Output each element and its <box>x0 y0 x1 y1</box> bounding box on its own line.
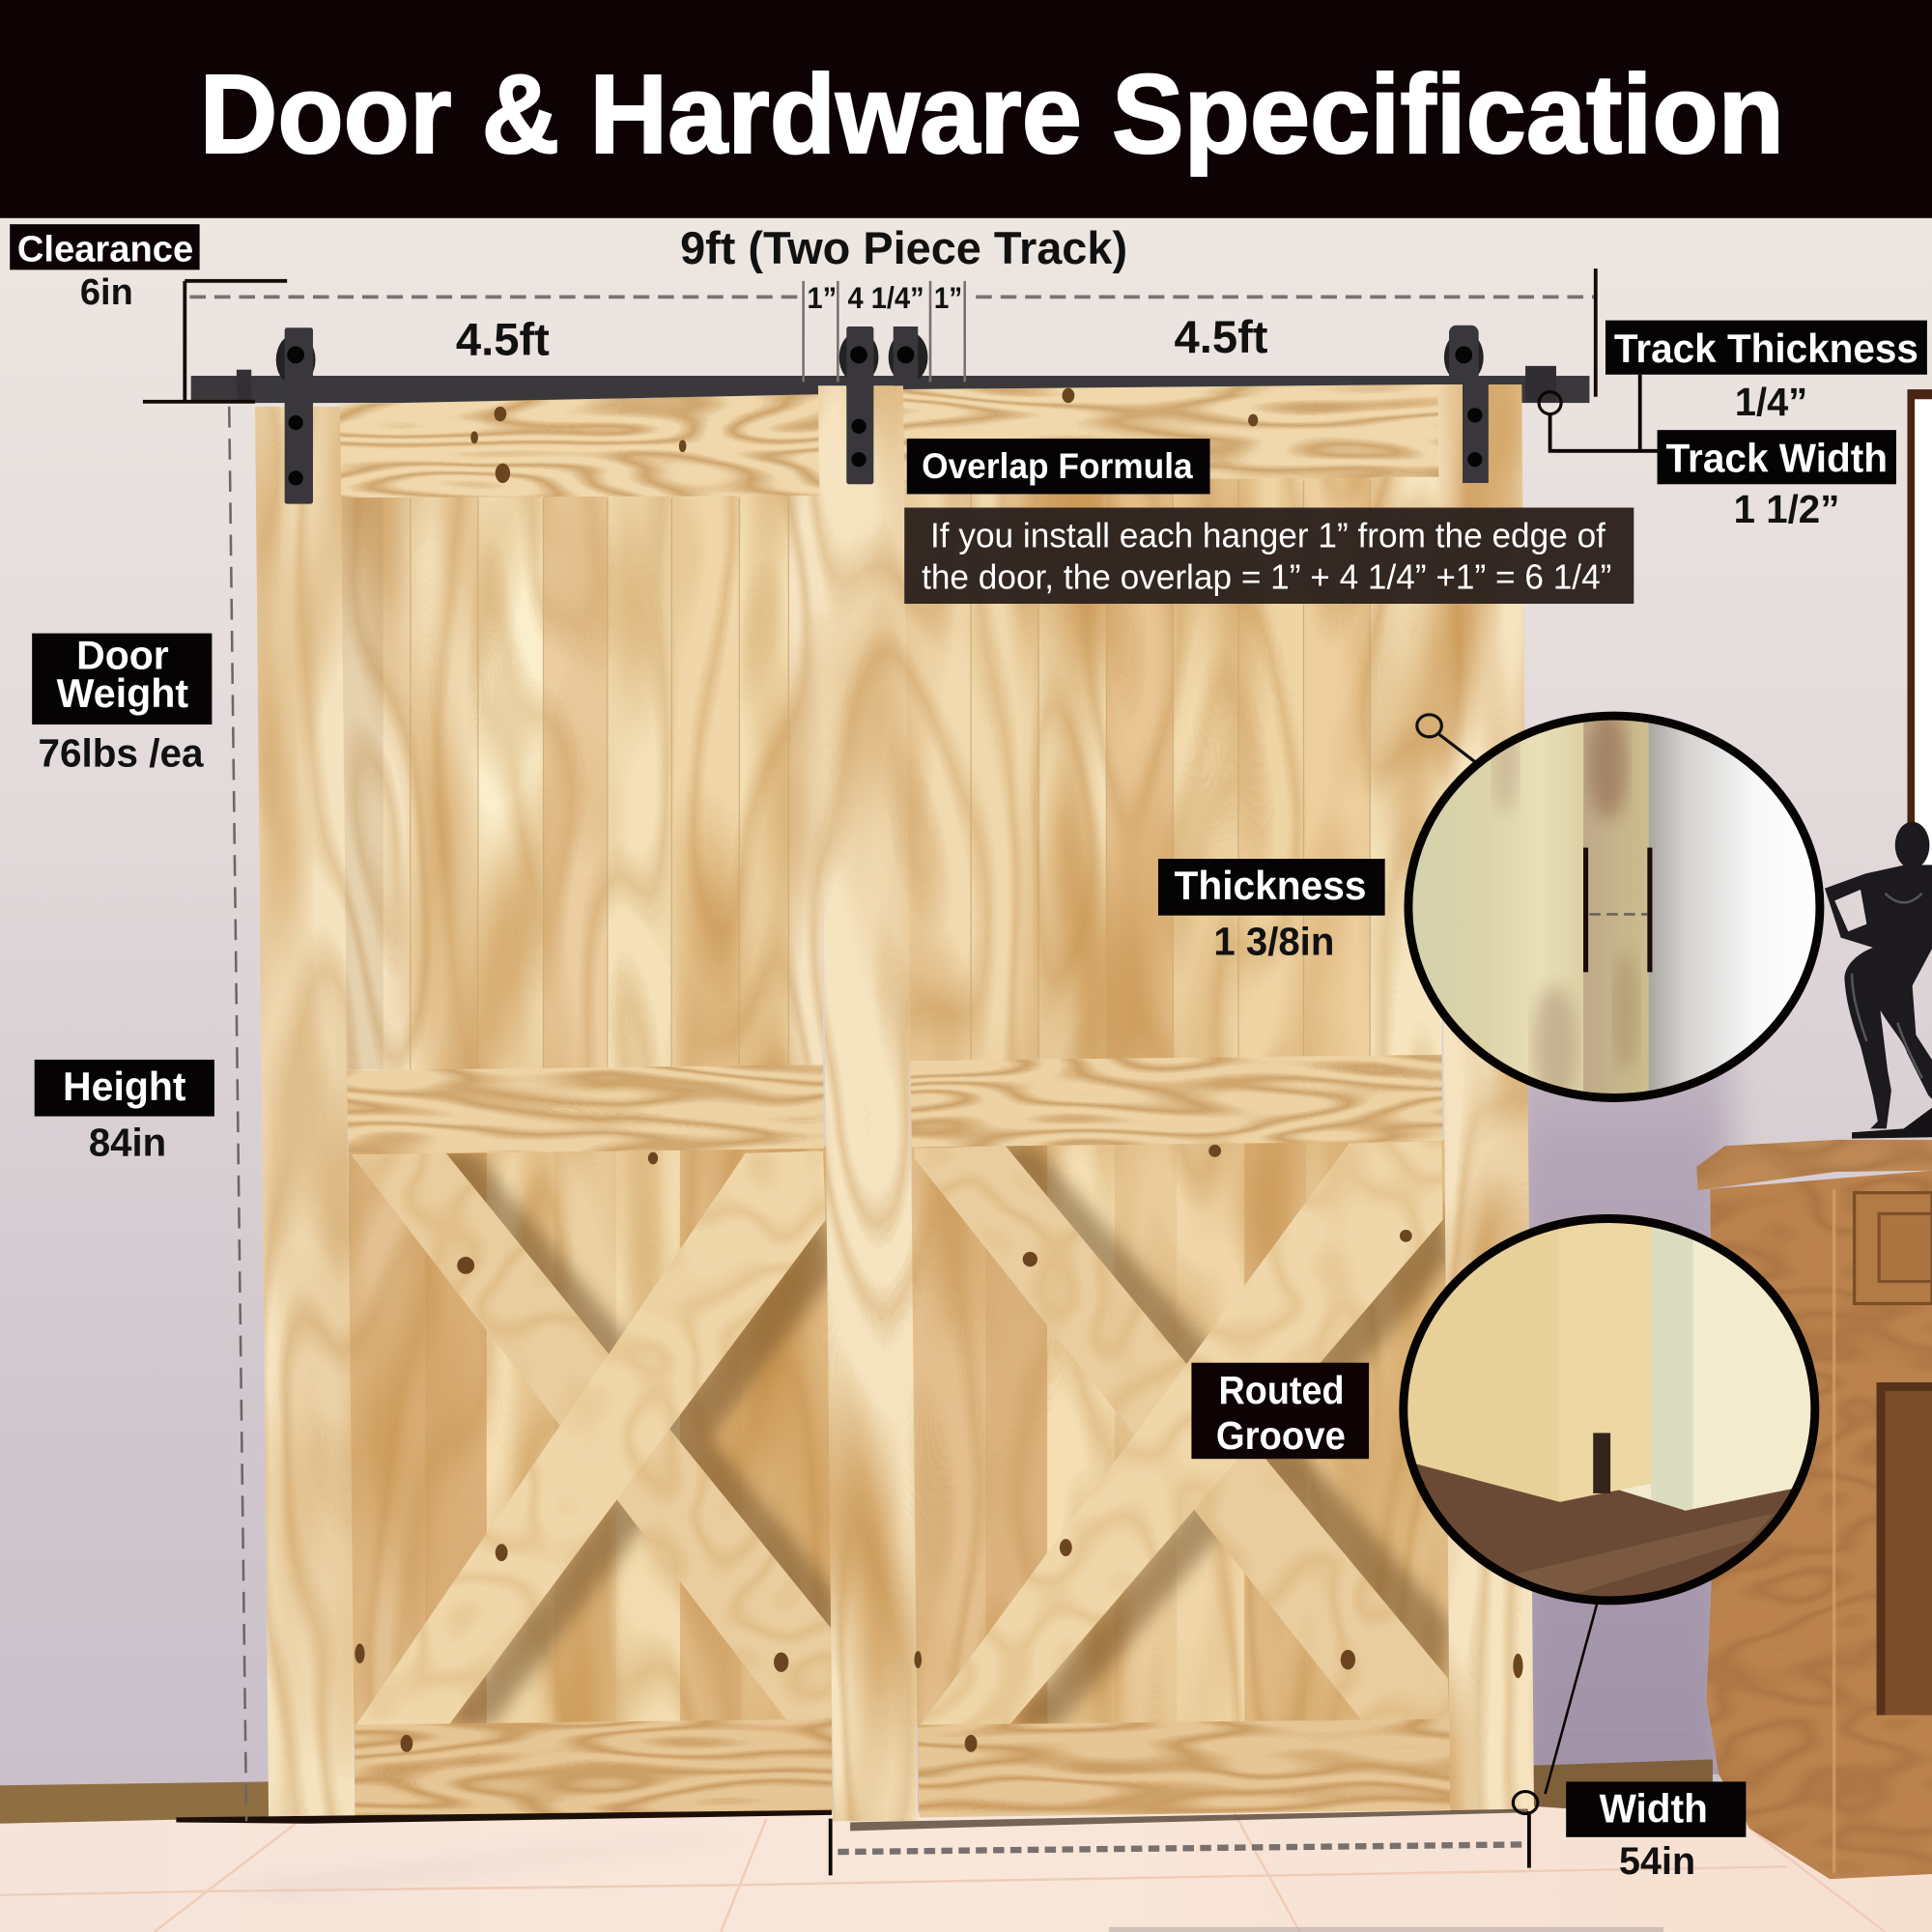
value: width: 54in <box>1619 1840 1695 1883</box>
left stile <box>818 385 918 1821</box>
label: track width: Track Width <box>1665 436 1888 481</box>
label: routed groove <box>1191 1363 1369 1459</box>
wall behind door <box>1648 723 1816 1091</box>
wall in lens <box>1559 1227 1810 1511</box>
right stile <box>1438 384 1534 1811</box>
brace ascending <box>921 1141 1443 1725</box>
door end face <box>1560 1213 1651 1502</box>
lavender shaded wall section <box>1509 887 1731 1775</box>
track callout leader <box>1539 375 1658 451</box>
value: door weight: 76lbs /ea <box>39 730 204 775</box>
label: door weight <box>32 633 212 724</box>
hanger: center left <box>839 327 878 484</box>
routed groove slot <box>1593 1433 1610 1493</box>
upper panel shadow <box>341 497 384 1069</box>
value: overlap offsets: 1” <box>934 280 962 315</box>
bottom rail <box>355 1719 832 1816</box>
cabinet drawer <box>1855 1193 1932 1303</box>
label: overlap formula <box>907 439 1210 494</box>
groove magnifier <box>1392 1213 1824 1614</box>
thickness magnifier <box>1405 708 1828 1109</box>
label: height: Height <box>63 1064 186 1109</box>
middle rail <box>911 1055 1443 1148</box>
cabinet top <box>1696 1140 1932 1190</box>
wall picture frame <box>1907 389 1932 882</box>
floor shadow lines <box>176 1808 1528 1831</box>
label: door weight: Door <box>76 633 169 678</box>
statue <box>1825 822 1932 1139</box>
width dimension <box>831 1811 1529 1875</box>
thickness ticks <box>1586 848 1650 972</box>
door edge wood <box>1405 712 1649 1101</box>
thickness dashed line <box>1589 913 1647 915</box>
middle rail <box>346 1065 824 1154</box>
floor in lens <box>1416 1464 1792 1596</box>
baseboard right <box>1528 1759 1713 1814</box>
statue body <box>1825 865 1932 1128</box>
statue head <box>1895 822 1929 868</box>
value: thickness: 1 3/8in <box>1213 920 1334 964</box>
label: width <box>1566 1781 1746 1837</box>
overlap formula description: If you install each hanger 1” from the edge of <box>930 516 1605 554</box>
label: routed groove: Routed <box>1218 1368 1345 1412</box>
right door <box>818 384 1534 1821</box>
baseboard left <box>0 1781 271 1824</box>
value: overlap offsets: 1” <box>807 280 837 315</box>
value: right half track: 4.5ft <box>1175 312 1268 363</box>
value: track width: 1 1/2” <box>1734 487 1839 531</box>
statue plinth <box>1852 1108 1932 1139</box>
upper panel seams <box>971 480 1370 1060</box>
label: clearance: Clearance <box>17 228 193 270</box>
hanger: far left <box>276 327 316 504</box>
upper panel planks <box>341 493 823 1072</box>
upper panel seams <box>411 497 788 1069</box>
brace shadows <box>985 1146 1454 1725</box>
top rail <box>903 384 1439 482</box>
hanger: center right <box>889 327 927 385</box>
label: routed groove: Groove <box>1216 1413 1346 1458</box>
label: thickness: Thickness <box>1175 863 1367 908</box>
track end marker <box>1594 269 1597 397</box>
value: overlap offsets <box>807 280 962 315</box>
brace descending <box>352 1153 832 1722</box>
left stile <box>255 407 355 1819</box>
title: Door & Hardware Specification <box>200 51 1784 177</box>
floor light bands <box>222 1836 739 1897</box>
knots <box>355 407 788 1752</box>
left door <box>255 394 844 1819</box>
overlap ticks <box>804 281 965 382</box>
value: height: 84in <box>89 1120 166 1164</box>
bottom rail <box>918 1719 1450 1817</box>
top rail <box>339 394 823 497</box>
label: width: Width <box>1600 1785 1708 1831</box>
knots <box>914 388 1523 1752</box>
label: height <box>35 1060 214 1117</box>
floor tile lines <box>0 1814 1886 1932</box>
label: track thickness: Track Thickness <box>1614 326 1918 371</box>
door side face <box>1407 1229 1560 1502</box>
header band <box>0 0 1932 218</box>
lower panel planks <box>349 1146 831 1731</box>
cabinet <box>1696 1140 1932 1879</box>
overlap formula description: the door, the overlap = 1” + 4 1/4” +1” = 6 1/4” <box>922 558 1611 597</box>
overlap formula description <box>904 508 1634 604</box>
upper panel planks <box>903 474 1441 1065</box>
height dashed line <box>229 407 246 1821</box>
brace ascending <box>356 1151 826 1725</box>
brace shadows <box>425 1152 844 1725</box>
floor <box>0 1806 1932 1932</box>
value: left half track: 4.5ft <box>456 314 550 365</box>
value: overlap offsets: 4 1/4” <box>848 280 924 315</box>
value: clearance: 6in <box>80 271 133 313</box>
thickness callout leader <box>1417 715 1476 763</box>
statue highlights <box>1852 894 1922 1078</box>
lower panel planks <box>912 1140 1449 1725</box>
cabinet body <box>1707 1171 1932 1879</box>
label: door weight: Weight <box>57 670 188 716</box>
clearance marker <box>143 281 287 402</box>
top dashed dimension line <box>189 296 1595 298</box>
value: track thickness: 1/4” <box>1735 380 1807 424</box>
hanger: far right <box>1444 326 1489 483</box>
rug edge <box>1109 1927 1663 1932</box>
width callout leader <box>1513 1605 1597 1814</box>
barn track <box>191 366 1589 403</box>
cabinet recess <box>1877 1382 1932 1716</box>
brace descending <box>914 1146 1449 1720</box>
label: overlap formula: Overlap Formula <box>922 446 1193 486</box>
label: track length: 9ft (Two Piece Track) <box>680 223 1127 274</box>
